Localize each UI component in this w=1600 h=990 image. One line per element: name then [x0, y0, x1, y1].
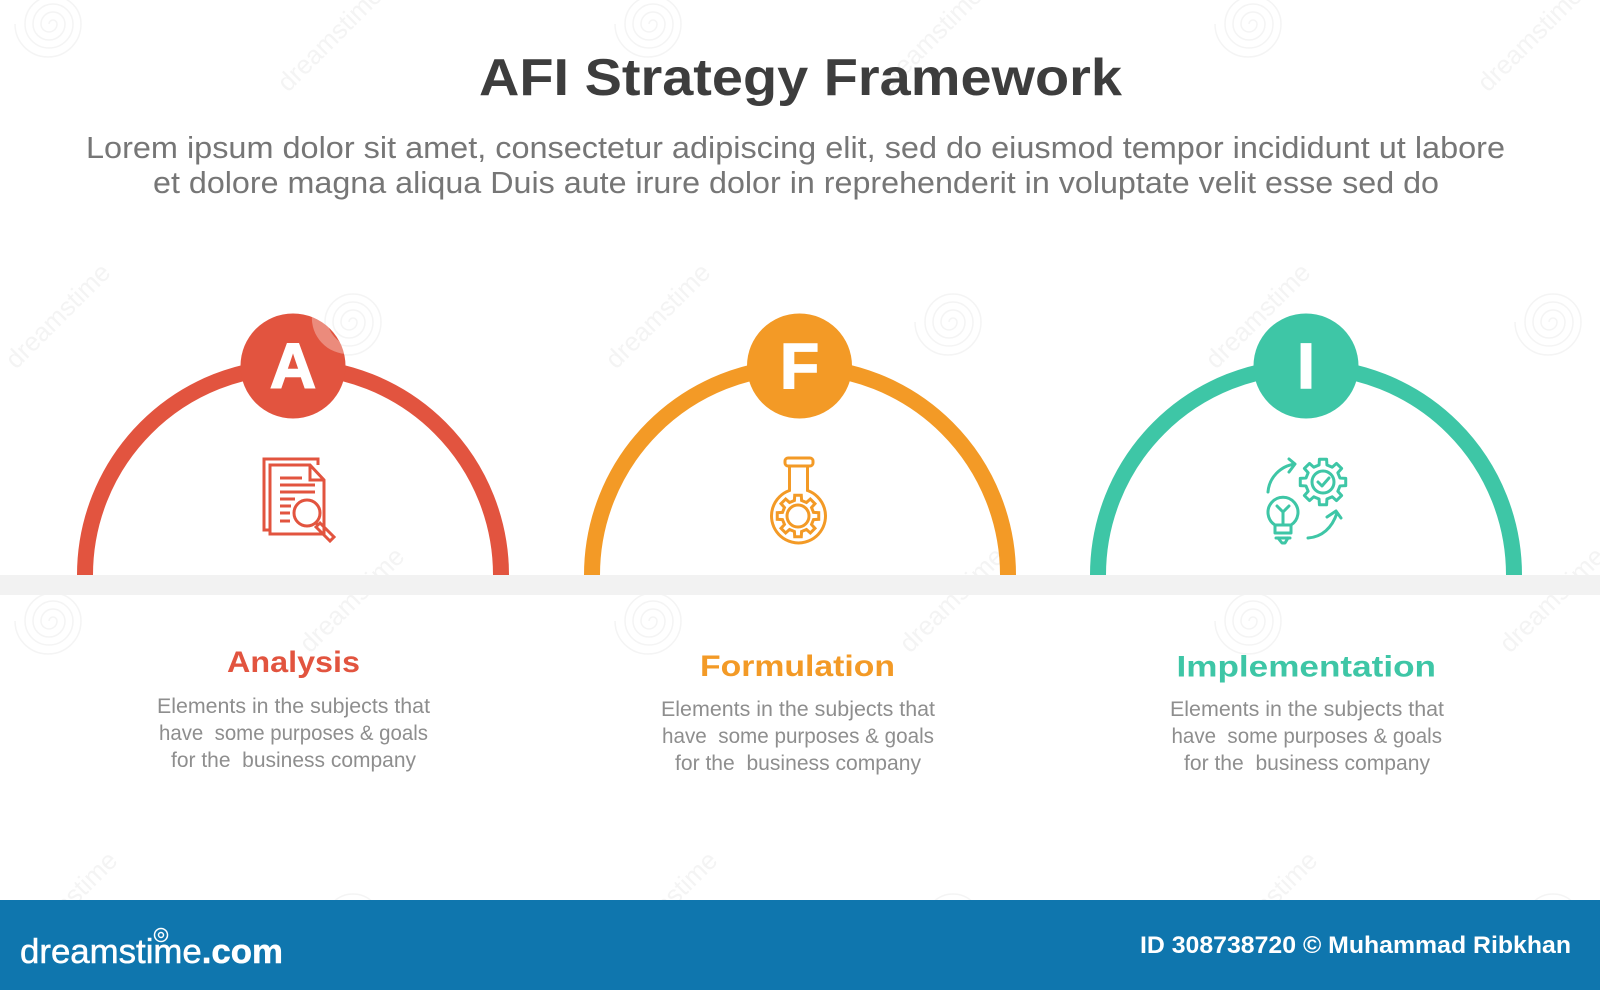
heading: Analysis: Analysis [227, 646, 360, 679]
description: Implementation [1170, 697, 1444, 775]
badge: letter F: F [780, 330, 819, 402]
description: Analysis: have some purposes & goals [159, 721, 428, 745]
text: dreamstime [893, 541, 1010, 658]
footer bar [0, 900, 1600, 990]
description: Analysis: for the business company [171, 748, 416, 772]
subtitle text block: et dolore magna aliqua Duis aute irure dolor in reprehenderit in voluptate velit esse sed do [153, 165, 1439, 200]
text: dreamstime [1199, 257, 1316, 374]
description: Analysis [157, 694, 430, 772]
heading: Implementation: Implementation [1176, 650, 1436, 684]
badge: letter F [747, 314, 852, 418]
red half-circle arc [85, 367, 501, 575]
orange half-circle arc [592, 367, 1008, 575]
panel: Formulation [592, 314, 1008, 775]
badge: letter A [240, 314, 349, 418]
description: Formulation [661, 697, 935, 775]
logo: dreamstime.com: dreamstime.com [20, 933, 283, 971]
description: Implementation: for the business company [1184, 751, 1430, 775]
description: Implementation: have some purposes & goals [1172, 724, 1442, 748]
icon: lightbulb, gear and arrows [1268, 459, 1346, 543]
text: dreamstime [606, 845, 723, 962]
subtitle text block [86, 130, 1505, 200]
description: Formulation: have some purposes & goals [662, 724, 934, 748]
icon: flask with gear [771, 458, 826, 543]
text: dreamstime [293, 541, 410, 658]
description: Formulation: Elements in the subjects that [661, 697, 935, 721]
description: Formulation: for the business company [675, 751, 921, 775]
teal half-circle arc [1098, 367, 1514, 575]
description: Implementation: Elements in the subjects that [1170, 697, 1444, 721]
badge: letter A: A [270, 330, 316, 402]
text: dreamstime [0, 257, 116, 374]
text: dreamstime [599, 257, 716, 374]
image ID and author credit: ID 308738720 © Muhammad Ribkhan [1140, 932, 1571, 959]
description: Analysis: Elements in the subjects that [157, 694, 430, 718]
text: dreamstime [1206, 845, 1323, 962]
heading: Formulation: Formulation [700, 650, 895, 683]
title: AFI Strategy Framework [479, 49, 1122, 107]
icon: document with magnifier [264, 459, 334, 541]
badge: letter I: I [1297, 330, 1315, 402]
subtitle text block: Lorem ipsum dolor sit amet, consectetur adipiscing elit, sed do eiusmod tempor incididunt ut labore [86, 130, 1505, 165]
baseline band [0, 575, 1600, 595]
panel: Analysis [85, 314, 501, 772]
badge: letter I [1254, 314, 1358, 418]
panel: Implementation [1098, 314, 1514, 775]
text: dreamstime [6, 845, 123, 962]
